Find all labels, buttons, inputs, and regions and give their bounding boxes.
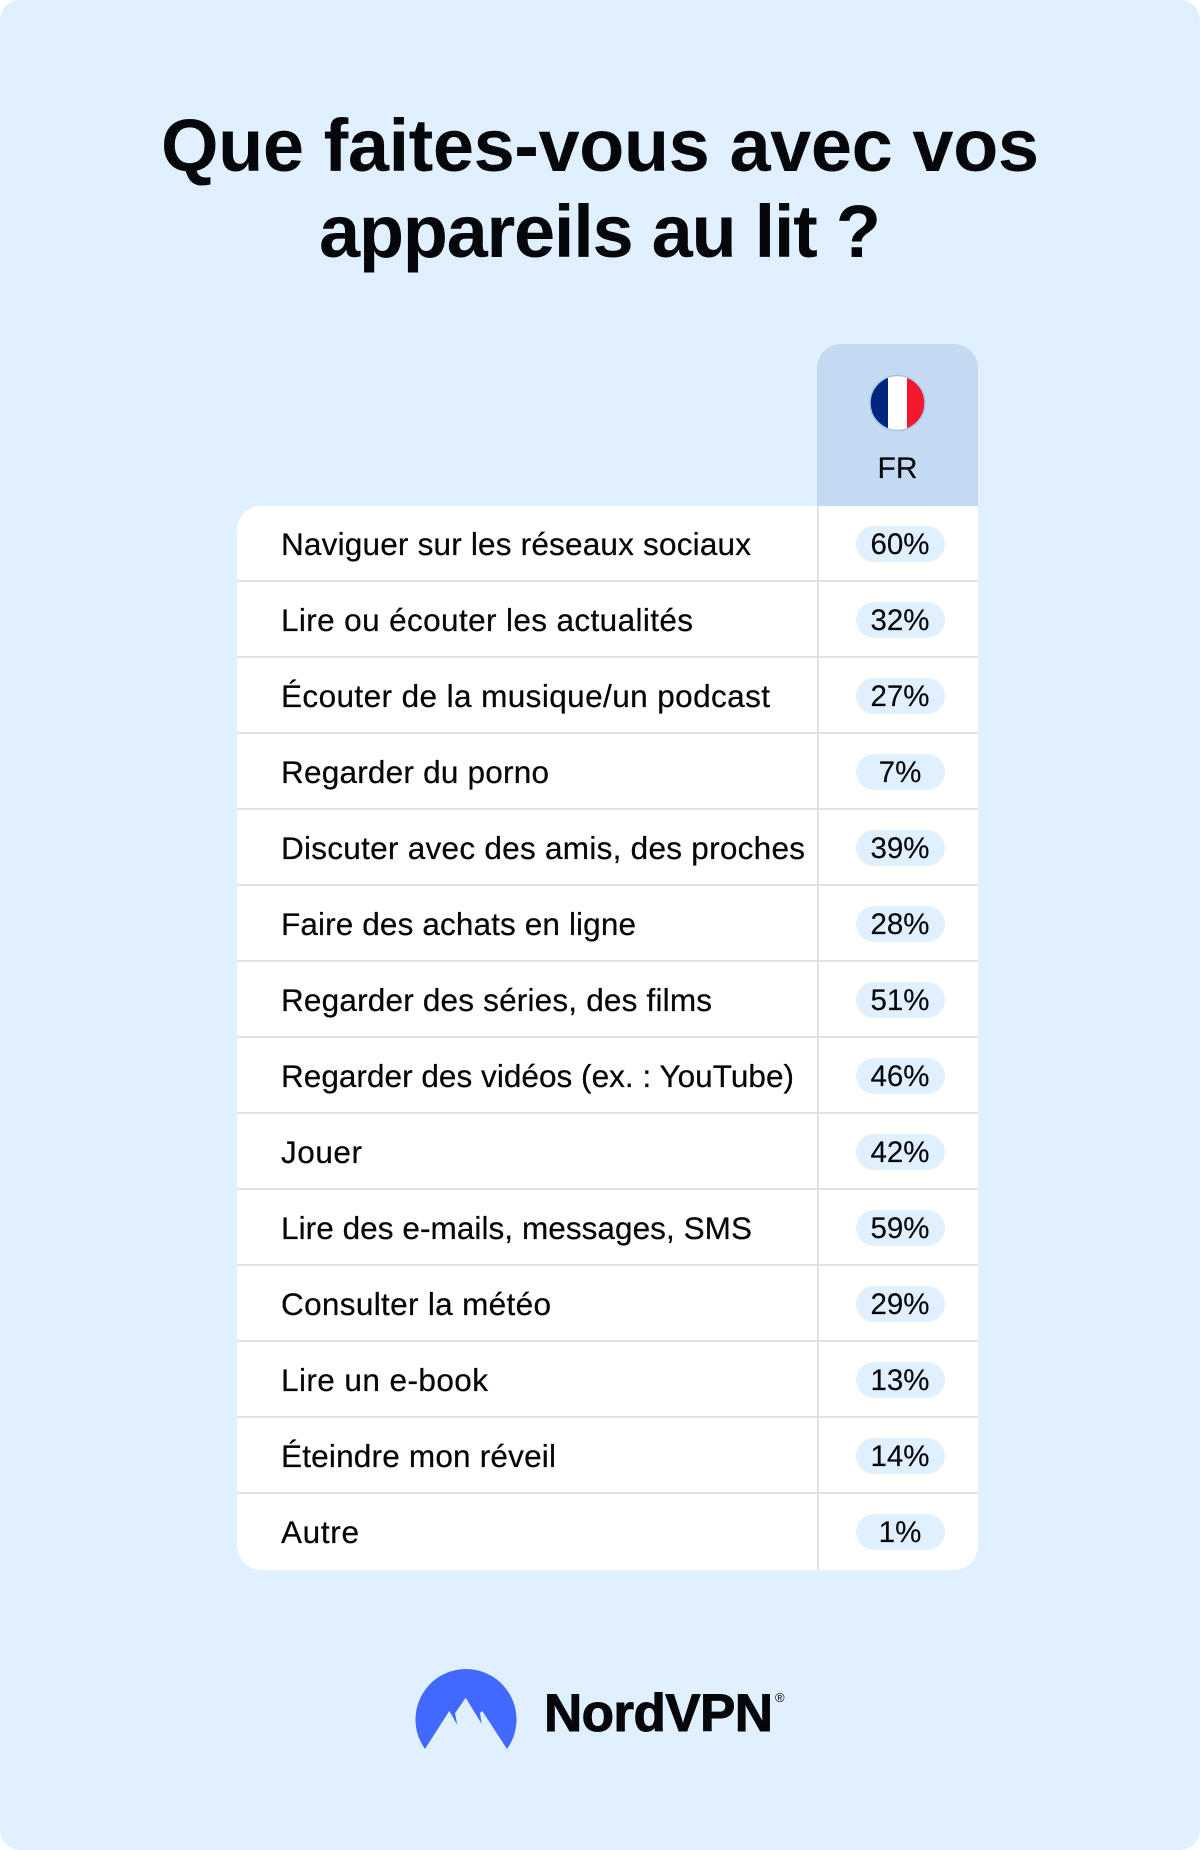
wordmark: NordVPN bbox=[544, 1684, 773, 1743]
title: appareils au lit ? bbox=[319, 190, 881, 273]
registered mark: ® bbox=[775, 1690, 785, 1705]
logo: NordVPN bbox=[416, 1669, 785, 1749]
row: achats: Faire des achats en ligne bbox=[281, 906, 636, 942]
row: porno bbox=[281, 754, 945, 790]
row: réseaux sociaux: Naviguer sur les réseaux sociaux bbox=[281, 526, 751, 562]
row: e-book: Lire un e-book bbox=[281, 1362, 488, 1398]
row: e-mails: 59% bbox=[870, 1212, 930, 1245]
row: actualités: 32% bbox=[870, 604, 930, 637]
row: météo: Consulter la météo bbox=[281, 1286, 551, 1322]
row: météo bbox=[281, 1286, 945, 1322]
row: jouer: Jouer bbox=[281, 1134, 362, 1170]
row: e-book: 13% bbox=[870, 1364, 930, 1397]
row: autre: 1% bbox=[879, 1516, 921, 1549]
title: Que faites-vous avec vos bbox=[161, 104, 1039, 187]
row: autre: Autre bbox=[281, 1514, 359, 1550]
row: météo: 29% bbox=[870, 1288, 930, 1321]
column header: FR bbox=[817, 344, 978, 506]
row: discuter: Discuter avec des amis, des proches bbox=[281, 830, 805, 866]
row: actualités: Lire ou écouter les actualités bbox=[281, 602, 693, 638]
row: porno: Regarder du porno bbox=[281, 754, 549, 790]
icon: French flag bbox=[870, 375, 926, 431]
row: actualités bbox=[281, 602, 945, 638]
row: musique: 27% bbox=[870, 680, 930, 713]
row: séries: 51% bbox=[870, 984, 930, 1017]
row: réveil bbox=[281, 1438, 945, 1474]
table background bbox=[237, 506, 978, 1570]
table bbox=[237, 506, 978, 1570]
row: porno: 7% bbox=[879, 756, 921, 789]
row: jouer bbox=[281, 1134, 945, 1170]
row: vidéos: 46% bbox=[870, 1060, 930, 1093]
row: jouer: 42% bbox=[870, 1136, 930, 1169]
row: réveil: Éteindre mon réveil bbox=[281, 1438, 556, 1474]
row: musique: Écouter de la musique/un podcast bbox=[281, 678, 770, 714]
title bbox=[161, 104, 1039, 273]
row: e-mails: Lire des e-mails, messages, SMS bbox=[281, 1210, 752, 1246]
row: achats bbox=[281, 906, 945, 942]
row: vidéos: Regarder des vidéos (ex. : YouTube) bbox=[281, 1058, 794, 1094]
row: discuter: 39% bbox=[870, 832, 930, 865]
column label: FR bbox=[878, 452, 918, 485]
row: réseaux sociaux: 60% bbox=[870, 528, 930, 561]
row: achats: 28% bbox=[870, 908, 930, 941]
icon: mountain bbox=[416, 1669, 516, 1749]
row: autre bbox=[281, 1514, 945, 1550]
row: séries: Regarder des séries, des films bbox=[281, 982, 712, 1018]
row: e-book bbox=[281, 1362, 945, 1398]
row: réveil: 14% bbox=[870, 1440, 930, 1473]
row: séries bbox=[281, 982, 945, 1018]
